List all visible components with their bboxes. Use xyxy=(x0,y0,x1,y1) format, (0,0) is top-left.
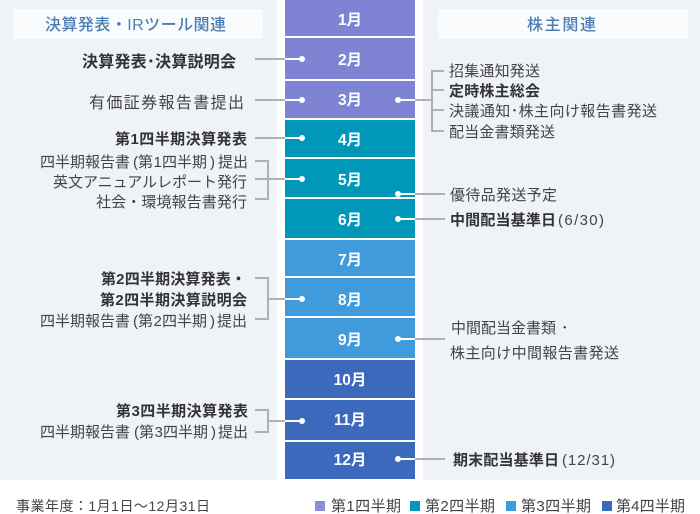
left items: second quarter, August xyxy=(40,270,305,330)
December xyxy=(285,442,415,479)
left items: second quarter, August: 四半期報告書(第2四半期)提出 xyxy=(40,313,247,330)
left item: securities report, March xyxy=(89,94,305,112)
left item: first quarter results, April xyxy=(115,130,305,148)
July xyxy=(285,240,415,276)
left items: second quarter, August: 第2四半期決算説明会 xyxy=(100,291,247,309)
heading: shareholder related xyxy=(438,9,688,39)
right items: March shareholder meeting: 定時株主総会 xyxy=(449,82,540,100)
panel: shareholder related xyxy=(423,0,700,480)
left items: second quarter, August: 第2四半期決算発表・ xyxy=(101,270,246,288)
November: 11月 xyxy=(334,412,366,429)
October: 10月 xyxy=(334,372,366,389)
left items: third quarter, November: 第3四半期決算発表 xyxy=(116,402,248,420)
August: 8月 xyxy=(338,292,362,309)
right item: interim dividend documents: 中間配当金書類･ xyxy=(451,320,569,337)
left item: results and briefing, February xyxy=(82,52,305,71)
October xyxy=(285,360,415,398)
right items: March shareholder meeting: 招集通知発送 xyxy=(449,63,540,80)
right items: March shareholder meeting: 決議通知･株主向け報告書発送 xyxy=(449,102,657,120)
September xyxy=(285,318,415,358)
July: 7月 xyxy=(338,252,362,269)
December: 12月 xyxy=(334,452,366,469)
September: 9月 xyxy=(338,332,362,349)
left items: May reports: 四半期報告書(第1四半期)提出 xyxy=(40,154,248,171)
right item: interim dividend record date: (6/30) xyxy=(558,212,604,229)
right item: year-end dividend record date: (12/31) xyxy=(562,452,615,469)
right items: March shareholder meeting: 配当金書類発送 xyxy=(449,124,555,141)
left item: results and briefing, February: 決算発表･決算説明会 xyxy=(82,52,236,71)
heading: shareholder related: 株主関連 xyxy=(527,16,596,34)
August xyxy=(285,278,415,316)
January xyxy=(285,0,415,36)
January: 1月 xyxy=(338,12,362,29)
heading: financial results and IR tools xyxy=(13,9,263,39)
right item: year-end dividend record date xyxy=(395,451,615,469)
right item: shareholder benefit shipment xyxy=(395,187,557,204)
right item: interim dividend documents: 株主向け中間報告書発送 xyxy=(450,345,619,362)
legend xyxy=(315,498,685,514)
November xyxy=(285,400,415,440)
May xyxy=(285,159,415,197)
May: 5月 xyxy=(338,172,362,189)
month column xyxy=(285,0,415,479)
February xyxy=(285,38,415,79)
left items: third quarter, November xyxy=(40,402,305,441)
right item: interim dividend record date xyxy=(395,211,604,229)
right item: shareholder benefit shipment: 優待品発送予定 xyxy=(450,187,557,204)
fiscal year note: 事業年度：1月1日～12月31日 xyxy=(16,498,210,514)
heading: financial results and IR tools: 決算発表・IRツール関連 xyxy=(45,15,226,34)
panel: financial results and IR tools xyxy=(0,0,277,480)
left item: first quarter results, April: 第1四半期決算発表 xyxy=(115,130,247,148)
June xyxy=(285,199,415,238)
left items: May reports: 社会・環境報告書発行 xyxy=(96,194,247,211)
February: 2月 xyxy=(338,52,362,69)
right item: interim dividend record date: 中間配当基準日 xyxy=(450,211,556,229)
April: 4月 xyxy=(338,132,362,149)
left items: May reports: 英文アニュアルレポート発行 xyxy=(53,173,247,191)
left item: securities report, March: 有価証券報告書提出 xyxy=(89,94,244,112)
March: 3月 xyxy=(338,92,362,109)
right item: interim dividend documents xyxy=(395,320,619,362)
left items: May reports xyxy=(40,154,305,211)
left items: third quarter, November: 四半期報告書(第3四半期)提出 xyxy=(40,424,248,441)
April xyxy=(285,120,415,157)
March xyxy=(285,81,415,118)
right item: year-end dividend record date: 期末配当基準日 xyxy=(453,451,559,469)
June: 6月 xyxy=(338,212,362,229)
right items: March shareholder meeting xyxy=(395,63,657,141)
